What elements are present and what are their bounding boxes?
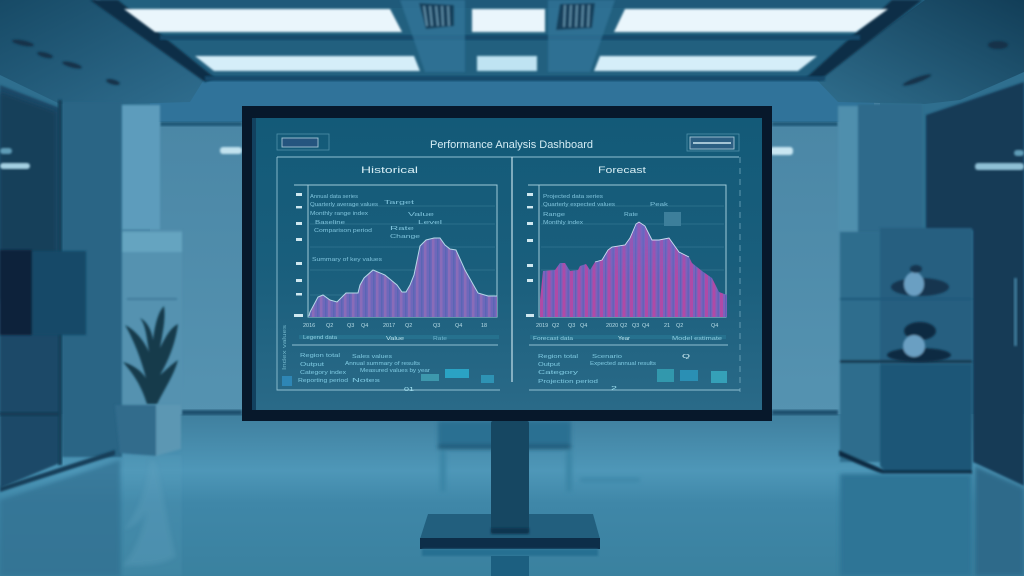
left chart annotations: Monthly range index xyxy=(310,211,368,217)
button: top right xyxy=(687,134,739,151)
left side of room xyxy=(0,85,242,576)
left data table: 01 xyxy=(404,387,414,393)
wall-mounted dark panel xyxy=(0,250,86,335)
left floor reflection xyxy=(0,460,120,576)
left legend band: Legend data xyxy=(303,335,338,341)
right x axis labels: Q3 xyxy=(568,323,575,329)
left chart annotations xyxy=(310,194,442,263)
right data table: Projection period xyxy=(538,379,598,385)
right data table: Expected annual results xyxy=(590,361,656,367)
left data table: Annual summary of results xyxy=(345,361,420,367)
glass cabinet xyxy=(122,230,182,415)
right data table: Q xyxy=(682,354,691,360)
plant reflection xyxy=(122,460,176,566)
pillar xyxy=(62,102,122,457)
left data table: Sales values xyxy=(352,354,392,360)
right data table xyxy=(538,354,727,392)
left chart annotations: Level xyxy=(418,220,442,226)
left x axis labels: Q3 xyxy=(347,323,354,329)
right data table: Region total xyxy=(538,354,578,360)
right legend band: Model estimate xyxy=(672,336,722,342)
left chart annotations: Rate xyxy=(390,226,414,232)
ceiling vents xyxy=(400,0,615,72)
right data table: Scenario xyxy=(592,354,622,360)
icon: cabinet ornaments xyxy=(887,265,951,362)
left chart annotations: Value xyxy=(408,212,434,218)
panel: left chart xyxy=(282,165,499,393)
monitor xyxy=(242,106,772,421)
neck xyxy=(491,421,529,533)
button: top left xyxy=(277,134,329,150)
right chart annotations xyxy=(543,194,681,226)
left x axis labels: Q4 xyxy=(361,323,368,329)
right x axis labels: 2019 xyxy=(536,323,548,329)
screen xyxy=(252,118,762,410)
dark glass wall xyxy=(0,85,60,488)
left data table: Region total xyxy=(300,353,340,359)
right x axis labels: Q2 xyxy=(552,323,559,329)
left x axis labels xyxy=(303,323,487,329)
left chart annotations: Comparison period xyxy=(314,228,372,234)
dashboard title: Performance Analysis Dashboard xyxy=(430,139,593,151)
frame lines xyxy=(277,157,740,392)
left legend band: Value xyxy=(386,336,404,342)
left x axis labels: 2017 xyxy=(383,323,395,329)
left area chart xyxy=(309,238,497,317)
right legend band: Year xyxy=(618,336,630,342)
right chart annotations: Projected data series xyxy=(543,194,603,200)
base xyxy=(420,514,600,539)
left legend band: Rate xyxy=(433,336,447,342)
left grid lines xyxy=(310,206,495,295)
right x axis labels: Q4 xyxy=(642,323,649,329)
left chart annotations: Summary of key values xyxy=(312,257,382,263)
right legend band: Forecast data xyxy=(533,336,574,342)
right legend band xyxy=(529,335,728,345)
ceiling xyxy=(0,0,1024,126)
left x axis labels: Q2 xyxy=(405,323,412,329)
left x axis labels: Q4 xyxy=(455,323,462,329)
left x axis labels: 2016 xyxy=(303,323,315,329)
right x axis labels: Q4 xyxy=(580,323,587,329)
right chart annotations: Monthly index xyxy=(543,220,583,226)
left data table xyxy=(282,353,494,393)
left data table: Measured values by year xyxy=(360,368,430,374)
floor xyxy=(0,414,1024,576)
left data table: Reporting period xyxy=(298,378,348,384)
left chart annotations: Annual data series xyxy=(310,194,358,200)
monitor stand xyxy=(420,421,600,576)
left chart annotations: Change xyxy=(390,234,420,240)
right data table: Output xyxy=(538,362,561,368)
right side of room xyxy=(770,82,1024,576)
right chart annotations: Rate xyxy=(624,212,638,218)
icon: potted plant xyxy=(115,306,181,566)
monitor reflection on floor xyxy=(438,421,640,492)
right x axis labels: Q3 xyxy=(632,323,639,329)
right x axis labels xyxy=(536,323,718,329)
left x axis labels: Q3 xyxy=(433,323,440,329)
right data table: 2 xyxy=(611,386,617,392)
right x axis labels: Q4 xyxy=(711,323,718,329)
left x axis labels: Q2 xyxy=(326,323,333,329)
right x axis labels: 21 xyxy=(664,323,670,329)
right x axis labels: 2020 xyxy=(606,323,618,329)
ceiling light panels xyxy=(124,9,888,71)
right chart frame xyxy=(528,185,726,317)
right grid lines xyxy=(541,206,724,295)
left data table: Notes xyxy=(352,378,380,384)
dashboard header xyxy=(277,134,739,151)
right bar chart xyxy=(540,222,727,317)
dark glass door xyxy=(926,82,1024,486)
left chart heading: Historical xyxy=(361,165,418,176)
right x axis labels: Q2 xyxy=(676,323,683,329)
right chart annotations: Peak xyxy=(650,202,668,208)
left chart annotations: Target xyxy=(384,200,415,206)
right data table: Category xyxy=(538,370,578,376)
left chart annotations: Baseline xyxy=(315,220,345,226)
left data table: Output xyxy=(300,362,325,368)
right chart annotations: Range xyxy=(543,212,565,218)
left chart annotations: Quarterly average values xyxy=(310,202,378,208)
display cabinet xyxy=(839,228,972,474)
neck reflection xyxy=(491,556,529,576)
left legend band xyxy=(292,335,499,345)
right y axis ticks xyxy=(526,193,534,317)
back wall xyxy=(150,100,880,416)
right chart heading: Forecast xyxy=(598,165,646,176)
right x axis labels: Q2 xyxy=(620,323,627,329)
ceiling spotlights xyxy=(12,38,1008,87)
panel: right chart xyxy=(526,165,728,392)
right chart annotations: Quarterly expected values xyxy=(543,202,615,208)
left x axis labels: 18 xyxy=(481,323,487,329)
wall lights xyxy=(0,163,30,169)
left data table: Category index xyxy=(300,370,346,376)
left y axis ticks xyxy=(294,193,303,317)
left side scale: Index values xyxy=(282,324,288,370)
left chart frame xyxy=(294,185,497,317)
